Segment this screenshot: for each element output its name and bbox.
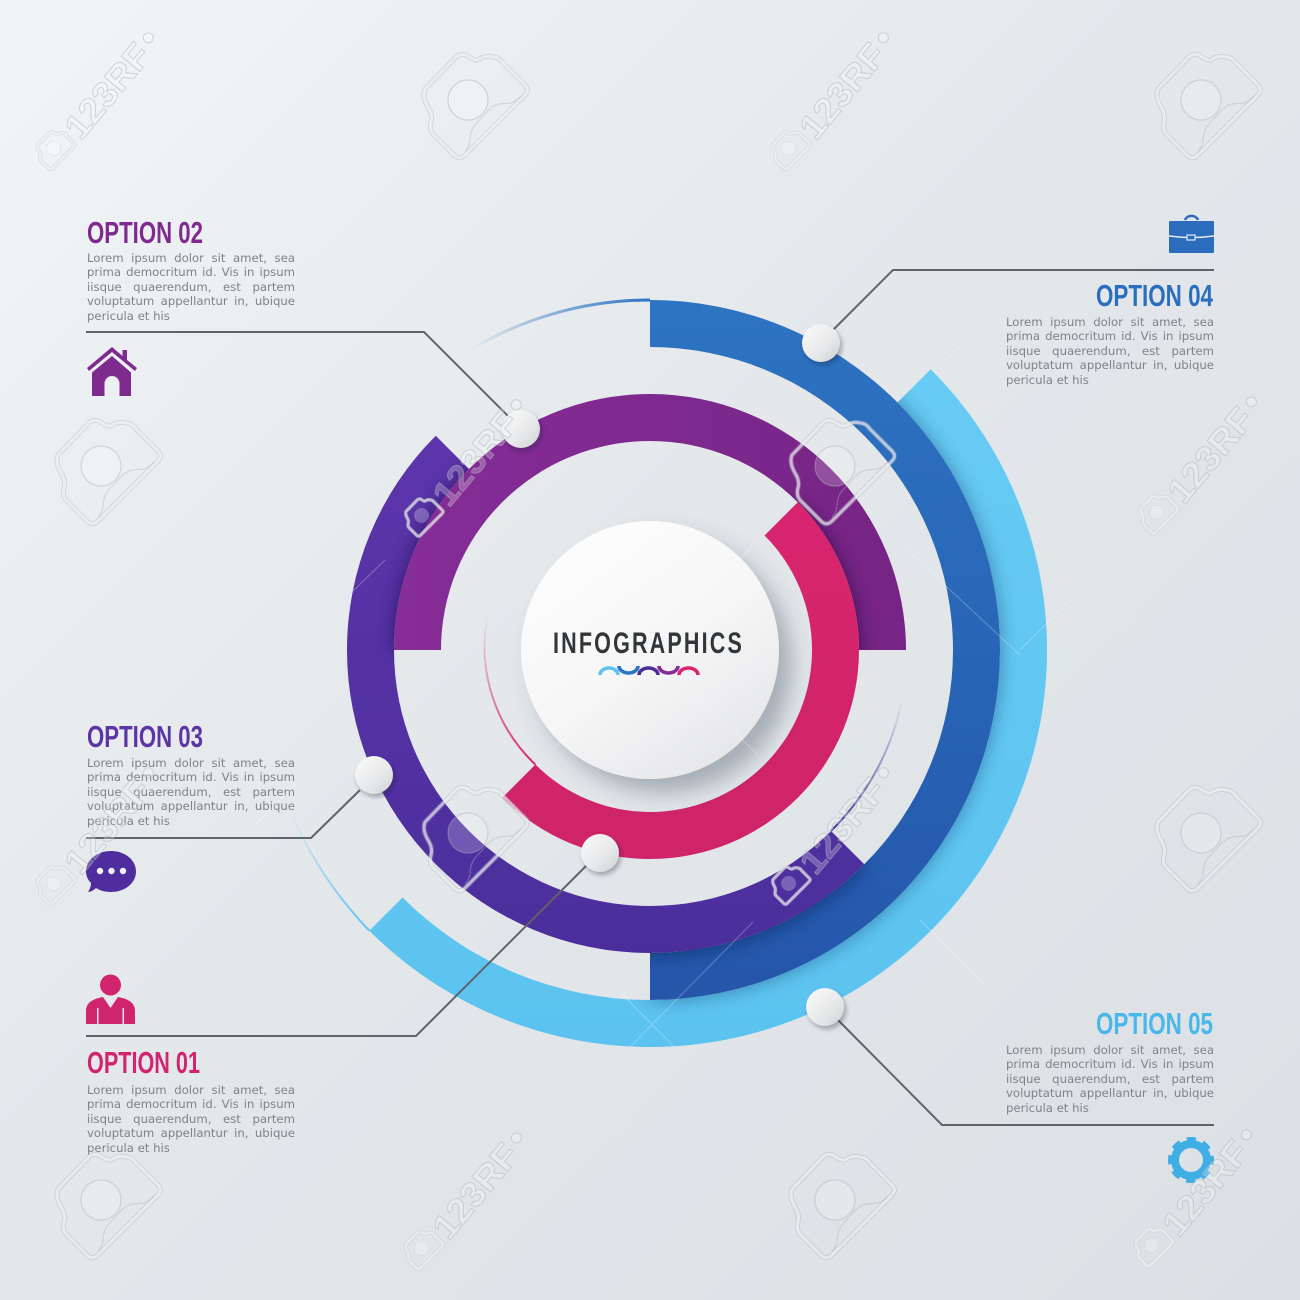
watermark 4: [387, 385, 541, 555]
watermark 1: 123RF: [57, 36, 159, 147]
center circle: [521, 521, 779, 779]
text block: option 04: voluptatum appellantur in, ubique: [1006, 358, 1214, 372]
thin fading arcs: [290, 300, 902, 931]
leader line: option 02: [86, 332, 510, 418]
marker: option 05: [806, 988, 844, 1026]
text block: option 03: Lorem ipsum dolor sit amet, sea: [87, 756, 295, 770]
text block: option 02: voluptatum appellantur in, ubique: [87, 294, 295, 308]
leader line: option 03: [86, 790, 360, 838]
ring: option 01 pink: [502, 502, 859, 859]
text block: option 01: prima democritum id. Vis in ipsum: [87, 1097, 295, 1111]
text block: option 04: pericula et his: [1006, 373, 1089, 387]
watermark 8: [1117, 1115, 1271, 1285]
text block: option 02: prima democritum id. Vis in ipsum: [87, 265, 295, 279]
watermark 6: [754, 753, 908, 923]
watermark 6: 123RF: [792, 771, 894, 882]
watermark 7: [387, 1118, 541, 1288]
icon: speech bubble: [86, 851, 136, 892]
heading: option 04: OPTION 04: [1096, 278, 1214, 313]
icon: gear: [1172, 1140, 1210, 1180]
text block: option 03: prima democritum id. Vis in ipsum: [87, 770, 295, 784]
marker: option 04: [802, 324, 840, 362]
text block: option 04: Lorem ipsum dolor sit amet, sea: [1006, 315, 1214, 329]
heading: option 03: OPTION 03: [87, 719, 203, 754]
ring: option 03 indigo: [347, 436, 864, 953]
leader line: option 01: [86, 866, 586, 1036]
marker: option 01: [581, 834, 619, 872]
watermark 5: 123RF: [57, 771, 159, 882]
text block: option 02: pericula et his: [87, 309, 170, 323]
watermark 5: [19, 753, 173, 923]
watermark 3: [1122, 382, 1276, 552]
ring: option 04 blue: [650, 300, 1000, 1000]
icon: house: [87, 347, 137, 396]
text block: option 02: [87, 251, 295, 323]
watermark 3: 123RF: [1160, 400, 1262, 511]
watermark 4: 123RF: [425, 403, 527, 514]
icon: briefcase: [1169, 216, 1214, 253]
watermark 1: [19, 18, 173, 188]
text block: option 01: voluptatum appellantur in, ubique: [87, 1126, 295, 1140]
text block: option 01: pericula et his: [87, 1141, 170, 1155]
text block: option 03: pericula et his: [87, 814, 170, 828]
heading: option 01: OPTION 01: [87, 1045, 200, 1080]
squiggle logo: [600, 666, 698, 675]
text block: option 01: iisque quaerendum, est partem: [87, 1112, 295, 1126]
text block: option 05: [1006, 1043, 1214, 1115]
text block: option 01: [87, 1083, 295, 1155]
heading: option 05: OPTION 05: [1096, 1006, 1213, 1041]
text block: option 04: [1006, 315, 1214, 387]
leader line: option 05: [838, 1020, 1214, 1125]
text block: option 03: [87, 756, 295, 828]
watermark 8: 123RF: [1155, 1133, 1257, 1244]
text block: option 05: Lorem ipsum dolor sit amet, sea: [1006, 1043, 1214, 1057]
text block: option 05: prima democritum id. Vis in ipsum: [1006, 1057, 1214, 1071]
watermark 7: 123RF: [425, 1136, 527, 1247]
text block: option 05: iisque quaerendum, est partem: [1006, 1072, 1214, 1086]
leader line: option 04: [833, 270, 1214, 330]
ring: option 05 light blue: [369, 369, 1047, 1047]
text block: option 01: Lorem ipsum dolor sit amet, sea: [87, 1083, 295, 1097]
text block: option 02: iisque quaerendum, est partem: [87, 280, 295, 294]
watermark 2: 123RF: [792, 36, 894, 147]
icon: person: [86, 974, 135, 1024]
ring: option 02 purple: [394, 394, 906, 650]
text block: option 04: iisque quaerendum, est partem: [1006, 344, 1214, 358]
watermark 2: [754, 18, 908, 188]
text block: option 04: prima democritum id. Vis in ipsum: [1006, 329, 1214, 343]
title: INFOGRAPHICS: [553, 627, 744, 660]
heading: option 02: OPTION 02: [87, 215, 203, 250]
text block: option 05: voluptatum appellantur in, ubique: [1006, 1086, 1214, 1100]
text block: option 02: Lorem ipsum dolor sit amet, sea: [87, 251, 295, 265]
marker: option 02: [502, 410, 540, 448]
marker: option 03: [355, 756, 393, 794]
text block: option 05: pericula et his: [1006, 1101, 1089, 1115]
text block: option 03: voluptatum appellantur in, ubique: [87, 799, 295, 813]
text block: option 03: iisque quaerendum, est partem: [87, 785, 295, 799]
